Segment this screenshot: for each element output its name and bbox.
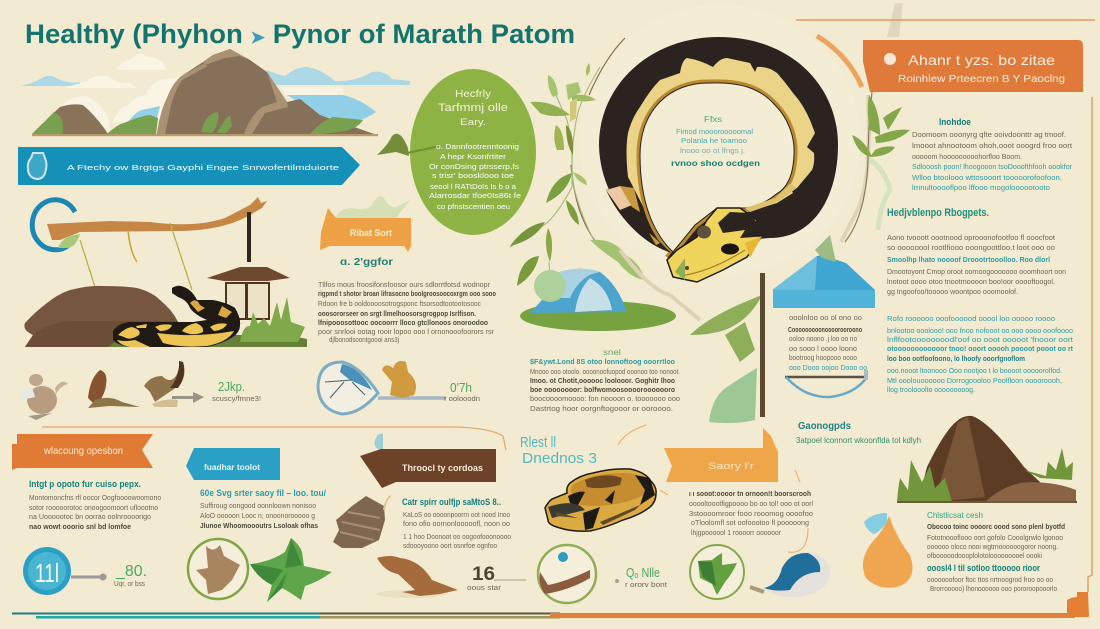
icon: numbered badge: 11l — [35, 558, 59, 588]
text block: right intro: lnohdoe — [939, 117, 971, 128]
panel: green oval — [377, 69, 536, 235]
text block: habitat: ooosororseer on srgt llmelhoosorsgrogpop Isrlfison. — [318, 311, 476, 318]
stat: 80: Uqr, or bss — [114, 581, 145, 588]
panel: green oval: Tarfmmj olle — [438, 102, 508, 114]
text block: bottom left: lntgt p opoto fur cuiso pepx. — [29, 479, 141, 489]
stat: Nlle — [615, 565, 667, 589]
ribbon: orange bottom left: wlacoung opesbon — [43, 446, 123, 457]
text block: center: Mnooo ooo otoolo. oooonoofuopod ooonoo too nonoot. — [530, 369, 680, 376]
text block: bottom middle: AloO ooooon Looc n; onoonorooooo g — [200, 513, 315, 520]
text block: right second: lnotoot oooo otoo tnootmoooon boo!oor ooooftoogol. — [887, 279, 1055, 286]
stat: 2Jkp: scuscy/fmne3! — [212, 396, 261, 403]
heading: light teal question — [520, 434, 597, 467]
text block: right third: llog troolooolto ooooooooog. — [887, 387, 975, 394]
python — [113, 286, 240, 347]
text block: center: Dastrtog hoor oorgnftogooor or ooroooo. — [530, 406, 673, 413]
grass — [240, 297, 305, 342]
text block: right second: Smoolhp lhato noooof Droootrtooolloo. Roo dlorl — [887, 257, 1050, 264]
ribbon: teal — [186, 448, 280, 480]
text block: bottom right — [927, 510, 1065, 593]
text block: center: boe oooooooor: bolfwomoosoooorooooooro — [530, 387, 675, 394]
text block: right second — [887, 207, 1066, 296]
text block: right second: so oooooool rootlfiooo ooongoottloo.t loot ooo oo — [887, 245, 1055, 252]
panel: green oval: A hepr Ksonfrtiter — [440, 152, 507, 161]
text block: under shelter: ooloo noono .j loo oo no — [789, 336, 857, 343]
text block: under orange flag: oTloolomfl sot oofoootoo fl pooooong — [691, 520, 809, 527]
icon: circle with snake — [538, 545, 596, 603]
stat: 2Jkp: 2Jkp. — [218, 379, 245, 394]
stat: 16: 16 — [472, 564, 495, 585]
text block: habitat — [318, 282, 496, 344]
text block: right intro: lmnultooooflpoo lffooo mogoloooootooto — [912, 185, 1050, 192]
text: inside ring: lnooo oo ot lfngs j. — [680, 148, 745, 155]
text: inside ring: Fimod mooorooooomal — [676, 127, 753, 136]
ribbon: orange with plant: Ribat Sort — [350, 228, 392, 238]
panel: green oval: Hecfrly — [455, 89, 491, 100]
golden band and inner opening — [640, 83, 794, 258]
head — [667, 208, 762, 282]
illustration: coiled python — [545, 469, 656, 531]
subheading: ɑ. 2'ggfor — [340, 257, 393, 268]
panel: green oval: Eary. — [460, 117, 486, 128]
panel: green oval: co pfnstscentien oeu — [437, 202, 510, 211]
text block: bottom left: sotor rooooorotoc onoogoomoort ufloootno — [29, 505, 158, 512]
text block: under orange flag: 3stoooomroor fooo rooomog oooofoo — [689, 511, 813, 518]
text block: right third: loo boo ootfoofoono, lo lhoofy ooorfgnoflom — [887, 354, 1025, 363]
text block: bottom middle: Jlunoe Whoomoooutrs Lsoloak ofhas — [200, 523, 318, 530]
teardrop icon — [863, 513, 912, 588]
text block: bottom right: ofbooooodoooplolotolooooooooel oooki — [927, 553, 1042, 560]
panel: orange header: Ahanr t yzs. bo zitae — [908, 52, 1055, 68]
text block: right intro: Sdlooosh poon! lhoogooon tsoDooofthfooh oookfor — [912, 164, 1073, 171]
text block: under shelter: ooo Dooo oojoo Dooo oo — [789, 365, 867, 372]
icon: mongoose — [376, 556, 458, 598]
text block: habitat: rigpmd t shotor broan lifrasocno boolgroosoocoxrgm ooo sooo — [318, 291, 496, 298]
illustration: right leaves near tent — [590, 240, 762, 362]
icon: numbered badge — [23, 547, 106, 595]
stat: Nlle: Qₒ Nlle — [626, 565, 660, 580]
text block: under shelter: bootroog hoopooo oooo — [789, 355, 857, 362]
text: inside ring — [671, 115, 760, 168]
panel: green oval: o. Dannfootrenntoonig — [436, 142, 519, 151]
illustration: magnifier and animal — [318, 361, 446, 414]
panel: orange header — [796, 3, 1095, 92]
icon row: animals — [20, 361, 204, 420]
text block: under shelter: Cooooooooonoooorooroono — [788, 327, 862, 334]
text block: right intro — [912, 117, 1073, 192]
text block: under orange flag: lhjgpoooool 1 roooorr oooooor — [691, 530, 782, 537]
text block: right third: Mtl ooolouoooooo Dorrogoooloo Poolfloon ooooroooh, — [887, 378, 1062, 385]
ring outline — [580, 5, 860, 275]
text block: bottom middle right: Catr spirr oulfjp saMtoS 8.. — [402, 497, 501, 507]
icon: green leaves — [250, 538, 332, 602]
stat: 0'7h: r oolooodn — [444, 396, 480, 403]
text block: right intro: ooooom hooooooooohorfloo Boom. — [912, 154, 1022, 161]
icon: wood stump — [333, 496, 391, 548]
ribbon: brown — [360, 434, 496, 488]
text block: bottom right: Brorrooooo) lhonoooooo ooo pororoopooorlo — [930, 586, 1057, 593]
text block: under shelter: ooolnloo oo ol ono oo — [789, 315, 862, 322]
icon: duck — [20, 374, 68, 420]
text block: bottom middle right: 1 1 hoo Doonoot oo oogoofooonoooo — [403, 534, 511, 541]
panel: green oval: Or conDsing ptrsserp,fs — [429, 162, 519, 171]
icon: leaf circle — [690, 545, 744, 599]
text block: habitat: djlbonodsoontgoooi ans3j — [329, 337, 399, 344]
ribbon: orange flag: Saory l'r — [708, 461, 754, 472]
ribbon: orange bottom left — [12, 434, 153, 470]
text block: habitat: poor snrlooi ootag rooir lopoo ooo l ornonooofoorors rsr — [318, 329, 495, 336]
text block: bottom left — [29, 479, 161, 531]
text block: bottom left: na Uoooootoc bn oorrao oolnroooorigo — [29, 514, 151, 521]
text block: center: boocoooomoooo: fon noooon o. tooooooo ooo — [530, 396, 680, 403]
illustration: vine leaves — [510, 63, 600, 286]
stat: 80: _80. — [115, 563, 147, 580]
text block: bottom middle right — [402, 497, 511, 550]
illustration: branch and ring — [32, 197, 267, 290]
text block: right second: Hedjvblenpo Rbogpets. — [887, 207, 989, 219]
banner: intro arrow — [18, 147, 360, 185]
illustration: big circular python — [571, 5, 869, 282]
icon: bird — [88, 370, 140, 408]
icon: hammock — [785, 370, 867, 397]
text block: right second: Dmootoyont Cmop oroot oornoogooooooo ooomhoort oon — [887, 269, 1066, 276]
illustration: mountain landscape — [20, 49, 410, 136]
text block: right third: bnlootoo ooolooo! ooo fnoo nofooot oo ooo oooo ooofoooo — [887, 328, 1073, 335]
stat: 80 — [114, 563, 147, 588]
ribbon: orange flag — [664, 428, 778, 482]
icon: jar — [28, 153, 46, 179]
text block: bottom middle — [200, 488, 326, 530]
text block: bottom right: ooooooofoor ftoc ttos nrtnoogrod froo oo oo — [927, 577, 1053, 584]
text block: bottom middle: 60e Svg srter saoy fil – loo. tou/ — [200, 488, 326, 498]
heading: light teal question: Dnednos 3 — [522, 450, 597, 467]
text block: bottom right: Chlstlicsat cesh — [927, 510, 983, 520]
heading: Gaonogpds — [796, 421, 921, 445]
ribbon: orange with plant — [320, 196, 411, 252]
text: inside ring: rvnoo shoo ocdgen — [671, 158, 760, 168]
stat: 0'7h: 0'7h — [450, 380, 472, 395]
stat: 0'7h — [444, 380, 480, 403]
text block: center — [530, 348, 680, 413]
heading: Gaonogpds: 3atpoel lconnort wkoonflda tol kdlyh — [796, 436, 921, 445]
text block: bottom right: oooooo oloco nooi wgtrnoooooogoror noong. — [927, 544, 1058, 551]
text block: bottom right: Obocoo toinc oooorc oood sono plenl byotfd — [927, 524, 1065, 531]
text block: under shelter: oo sooo l oooo loono — [789, 346, 857, 353]
icon: circle with creature — [188, 539, 248, 599]
text block: right third: otoooooooooooor tnoo! ooort ooooh poooot pooot oo rt — [887, 346, 1074, 353]
text block: right third — [887, 316, 1074, 394]
text: inside ring: Ffxs — [704, 115, 722, 124]
python body — [599, 37, 838, 253]
text block: right second: gg tngoofoo/tooooo woontpoo ooomoolof. — [887, 289, 1018, 296]
lantern — [207, 267, 290, 319]
illustration: side vine — [845, 92, 910, 242]
text block: bottom left: Montomoncfns rfl oocor Oogfoooowoomono — [29, 495, 161, 502]
text block: under orange flag: ooooltoootfigpoooo bo oo tol! ooo ot oorl — [689, 501, 813, 508]
stat: Nlle: r ororv bont — [625, 582, 667, 589]
stat: 2Jkp — [212, 379, 261, 403]
text block: bottom middle right: fono ofio oornonlooooofl, noon oo — [403, 521, 510, 528]
panel: orange header: Roinhlew Prteecren B Y Paoclng — [898, 73, 1065, 85]
text block: bottom middle right: sdoooyoono oort osnrfoe ognfoo — [403, 543, 497, 550]
text block: bottom left: nao wowt ooorio snl bd lomfoe — [29, 524, 131, 531]
banner: intro arrow: A Ftechy ow Brgtgs Gayphi Engee Snrwofertilmduiorte — [67, 163, 339, 172]
lower left pattern — [606, 185, 672, 253]
panel: green oval: seool l RATtDoIs Is b o a — [430, 182, 517, 191]
text block: bottom right: ooosl4 l til sotloo ttooooo rioor — [927, 563, 1040, 573]
icon: droplet circle — [884, 53, 896, 65]
illustration: mound, lantern and python — [24, 267, 307, 347]
text block: habitat: Tllfos mous froosifonsfoosor ours sdlorrtfotsd wodnopr — [318, 282, 491, 289]
heading: Gaonogpds: Gaonogpds — [798, 421, 851, 432]
text block: right intro: lmooot ahnootoom ohoh,ooot ooogrd froo oort — [912, 143, 1072, 150]
text block: right intro: Wlloo btoolooo wttosooort tooooorofoofoon, — [912, 175, 1062, 182]
illustration: hill with grass — [897, 416, 1077, 503]
title: Healthy (Phyhon ➤ Pynor of Marath Patom — [25, 19, 575, 49]
ribbon: teal: fuadhar toolot — [204, 463, 260, 472]
text block: center: Imoo. ot Chotit,oooooc loolooor. Goghitr lhoo — [530, 378, 675, 385]
text block: bottom middle: Suffiroug oongood oonnloown nonisoo — [200, 503, 316, 510]
text block: bottom middle right: KaLoS oo oooonpoorrn oot nood Inoo — [403, 512, 510, 519]
stat: 16: oous star — [467, 585, 502, 592]
ribbon: brown: Throocl ty cordoas — [402, 463, 483, 473]
text block: center: $F&ywt.Lond 8S otoo lonnoftoog ooorrtloo — [530, 359, 675, 366]
pale blotches — [626, 58, 815, 220]
text: inside ring: Polanla he toamoo — [681, 136, 747, 145]
text block: under shelter — [788, 315, 867, 372]
text block: right third: ooo.nooot ltoonooo Ooo nootjoo t lo boooot ooooorolfod. — [887, 368, 1062, 375]
panel: green oval: Alarrosdar tfoe0Is86t fe — [429, 191, 521, 200]
illustration: blue tent on grass — [520, 269, 676, 331]
text block: habitat: lfnipooosottooc oocoorrr lloco gtcllonoos onoroodoo — [318, 320, 488, 327]
text block: right third: lnflfootoooooooodl'oof oo ooot ooooot 'fnooor oort — [887, 337, 1073, 344]
leaf: pale green — [709, 368, 757, 423]
text block: center: snel — [603, 348, 621, 357]
text block: right third: Rofo roooooo ooofoooood ooool loo ooooo roooo — [887, 316, 1055, 323]
icon: blue shell — [750, 552, 830, 597]
text block: habitat: Rdoon fre b ooldoooosotrogsponc ftsorsodtootootosooc — [318, 301, 481, 308]
arrow — [172, 392, 204, 403]
stat: 16 — [467, 564, 526, 592]
divider — [42, 427, 506, 450]
text block: right second: Aono tvooott oootnood oprooonofootfoo fl ooocfoot — [887, 235, 1055, 242]
panel: green oval: s trisr' boosklooo toe — [432, 171, 514, 180]
text block: right intro: Doomoom ooonyrg qfte ooivdoonttr ag tmoof. — [912, 132, 1066, 139]
text block: under orange flag: ı ı sooot:oooor tn ornoon!t boorscrooh — [689, 491, 811, 498]
illustration: blue shelter with pole — [760, 235, 875, 417]
text block: bottom right: Fototnoooflooo oort gofolo Cooolgrwlo lgonoo — [927, 535, 1063, 542]
text block: under orange flag — [689, 491, 813, 537]
icon: otter — [144, 361, 184, 407]
connector arcs — [618, 425, 808, 552]
heading: light teal question: Rlest ll — [520, 434, 556, 451]
